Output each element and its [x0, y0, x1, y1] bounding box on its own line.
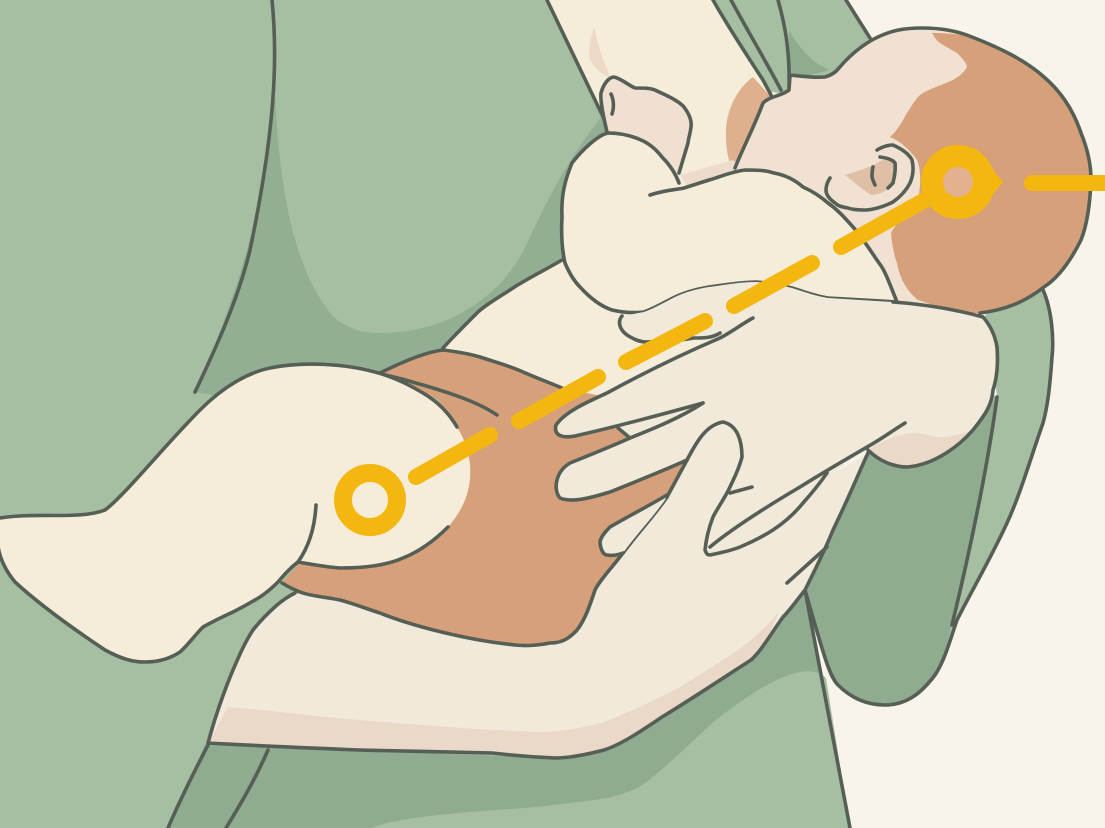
baby head: [735, 28, 1091, 314]
adult hand and fingers: [556, 282, 998, 555]
wrist shadow: [868, 430, 973, 467]
adult forearm: [208, 422, 868, 758]
lower finger: [600, 495, 667, 555]
finger two: [556, 403, 703, 500]
sleeve dark panel: [805, 397, 997, 705]
baby leg: [0, 364, 470, 662]
forearm shadow: [208, 613, 778, 758]
baby arm sleeve: [562, 133, 897, 313]
finger one: [556, 318, 753, 437]
torso seam: [443, 260, 562, 348]
palm fill beside thumb: [700, 430, 868, 555]
head outline: [735, 28, 1091, 313]
diaper: [282, 350, 720, 646]
hip marker: [343, 473, 397, 527]
diaper lower edge: [282, 497, 667, 646]
green strap top: [700, 0, 872, 95]
knuckle behind: [620, 316, 720, 342]
adult torso clothing: [0, 0, 850, 828]
gap between fingers: [612, 403, 703, 438]
lower darker clothing: [170, 590, 850, 828]
baby hand: [601, 77, 691, 175]
chest: [726, 77, 771, 170]
hair: [890, 33, 1091, 314]
thumb: [667, 422, 827, 555]
ear: [826, 145, 913, 210]
adult upper arm sleeve right: [805, 290, 1053, 705]
darker shadow fold: [195, 90, 607, 400]
torso seams: [195, 0, 275, 392]
adult upper arm skin: [547, 0, 771, 190]
alignment dashed line: [416, 183, 1105, 477]
sleeve edge of hand: [868, 302, 998, 467]
ear marker: [932, 156, 1003, 208]
lower light patch: [372, 671, 850, 828]
baby torso: [443, 260, 730, 410]
